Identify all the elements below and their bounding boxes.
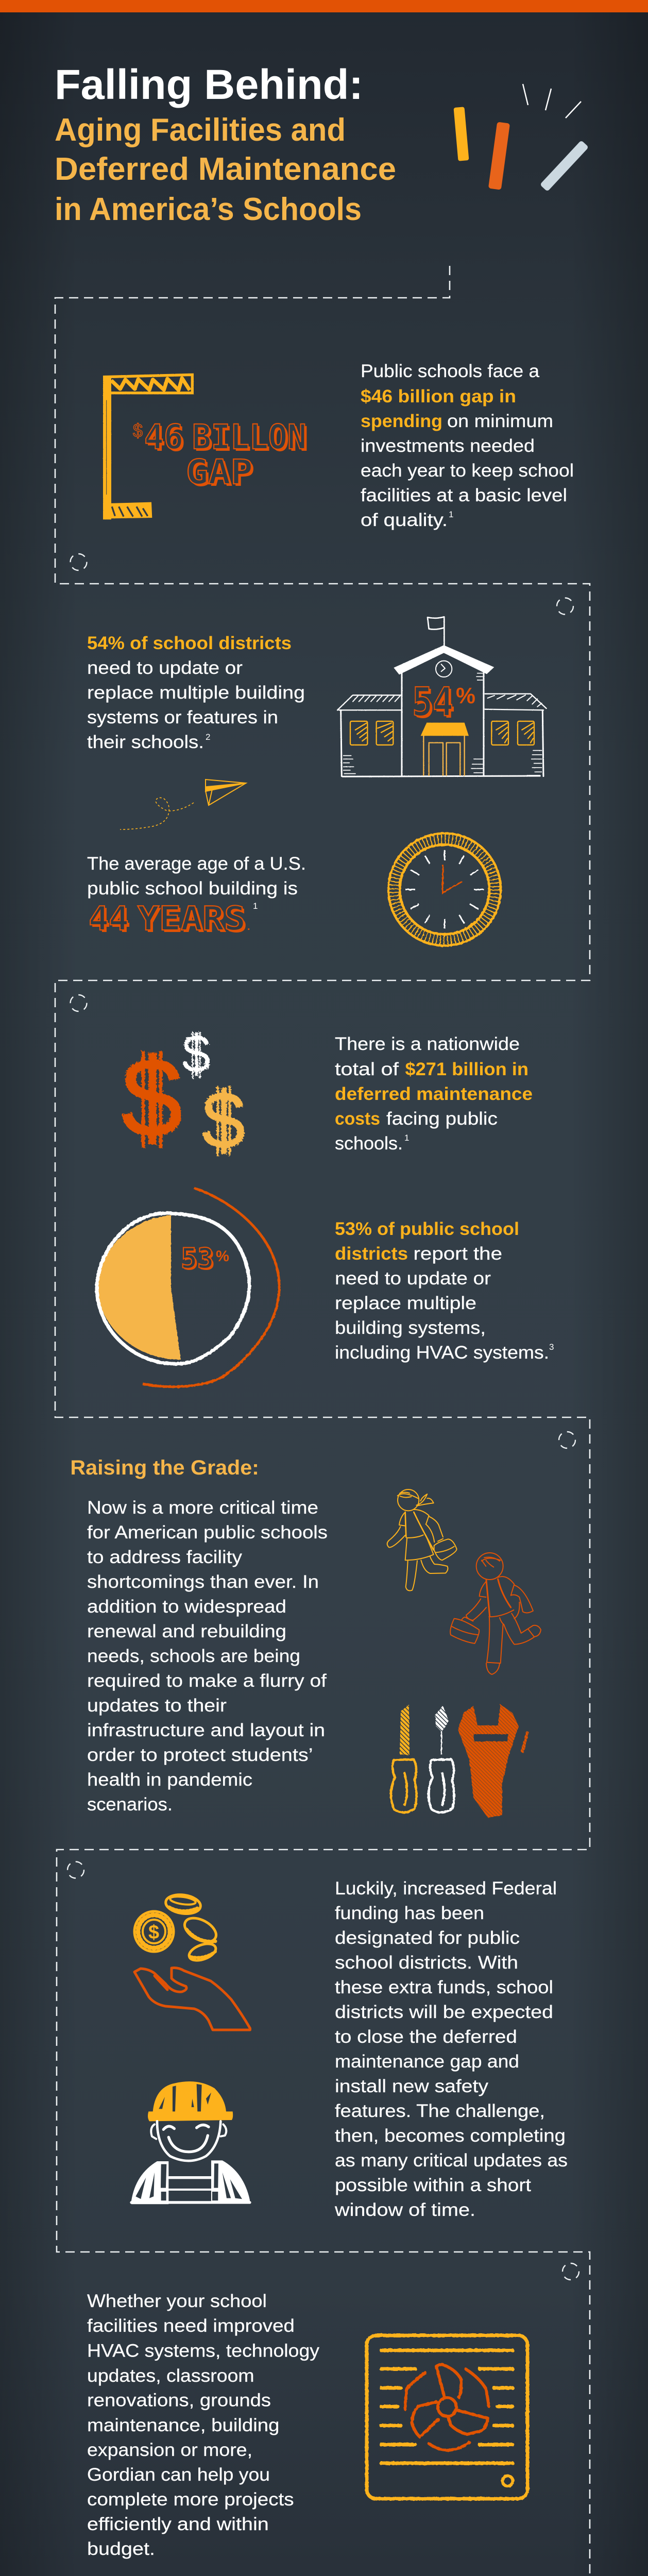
text: 271 billion deferred maintenance: total of	[335, 1059, 399, 1079]
text: 54 percent of districts: systems or features in	[87, 707, 278, 727]
stat: 46 billion gap: BILLON	[192, 417, 306, 457]
text: 53 percent of districts: need to update or	[335, 1268, 491, 1289]
dashed circle markers	[67, 554, 579, 2280]
text: average building age: The average age of a U.S.	[87, 854, 306, 874]
text: 54 percent of districts	[87, 633, 305, 752]
icon: dollar signs: $	[182, 1024, 211, 1084]
text: average building age: 1	[253, 901, 258, 911]
dashed connector path	[55, 266, 590, 2576]
icon: smiling construction worker	[131, 2081, 250, 2204]
title	[55, 61, 396, 227]
text: whether your school paragraph: HVAC systems, technology	[87, 2341, 320, 2361]
text: federal funding paragraph: Luckily, increased Federal	[335, 1878, 557, 1899]
stat: 46 billion gap: $	[133, 420, 143, 441]
text: 46 billion spending gap: spending	[361, 411, 442, 431]
title: Aging Facilities and	[55, 112, 346, 148]
text: critical time paragraph: addition to widespread	[87, 1597, 286, 1617]
heading: raising the grade: Raising the Grade:	[70, 1456, 259, 1479]
icon: dollar signs: $	[122, 1035, 182, 1160]
text: whether your school paragraph: maintenance, building	[87, 2415, 279, 2435]
text: 271 billion deferred maintenance	[335, 1034, 533, 1154]
stat: 46 billion gap: GAP	[186, 452, 253, 492]
text: federal funding paragraph: funding has been	[335, 1903, 484, 1923]
text: federal funding paragraph	[334, 1878, 568, 2220]
text: 46 billion spending gap: Public schools face a	[361, 361, 540, 381]
icon: 46 billion gap bracket	[103, 375, 192, 519]
text: whether your school paragraph: facilities need improved	[87, 2316, 295, 2336]
text: federal funding paragraph: these extra funds, school	[335, 1977, 553, 1997]
text: whether your school paragraph: renovations, grounds	[87, 2391, 271, 2410]
text: whether your school paragraph: efficiently and within	[87, 2514, 269, 2534]
chart: 53 percent pie	[97, 1188, 279, 1387]
text: 54 percent of districts: their schools.	[87, 732, 204, 752]
text: 53 percent of districts: districts	[335, 1244, 408, 1264]
text: whether your school paragraph: Gordian can help you	[87, 2465, 270, 2485]
text: 271 billion deferred maintenance: $271 billion in	[405, 1059, 528, 1079]
text: 53 percent of districts: including HVAC systems.	[335, 1343, 549, 1363]
icon: school building: 54	[412, 680, 453, 725]
text: 46 billion spending gap: investments needed	[361, 436, 535, 456]
text: federal funding paragraph: as many critical updates as	[335, 2150, 568, 2171]
text: federal funding paragraph: install new safety	[335, 2076, 489, 2096]
icon: dollar signs	[122, 1024, 245, 1165]
icon: tools	[391, 1704, 529, 1818]
text: 54 percent of districts: 54% of school districts	[87, 633, 292, 653]
text: 271 billion deferred maintenance: costs	[335, 1109, 380, 1129]
icon: school building: %	[456, 683, 475, 708]
text: critical time paragraph: to address facility	[87, 1547, 243, 1567]
text: critical time paragraph: required to make a flurry of	[87, 1671, 327, 1691]
icon: school building	[337, 617, 547, 776]
icon: boy walking with bag	[450, 1553, 541, 1674]
title: Falling Behind:	[55, 61, 363, 108]
text: 46 billion spending gap: 1	[449, 510, 453, 519]
text: 271 billion deferred maintenance: There is a nationwide	[335, 1034, 520, 1054]
text: critical time paragraph: updates to their	[87, 1696, 227, 1716]
text: critical time paragraph: health in pandemic	[87, 1770, 252, 1790]
text: whether your school paragraph	[87, 2291, 320, 2559]
text: average building age: .	[247, 921, 250, 933]
text: federal funding paragraph: maintenance gap and	[335, 2052, 519, 2072]
text: critical time paragraph: order to protect students’	[87, 1745, 313, 1765]
chart: 53 percent pie: 53	[182, 1244, 215, 1276]
text: critical time paragraph: infrastructure and layout in	[87, 1720, 325, 1740]
icon: coins falling into hand: $	[148, 1922, 159, 1943]
icon: girl walking with bag	[387, 1489, 457, 1590]
text: 271 billion deferred maintenance: 1	[404, 1133, 409, 1143]
text: federal funding paragraph: school districts. With	[335, 1953, 518, 1973]
text: 54 percent of districts: need to update or	[87, 658, 243, 678]
text: 46 billion spending gap: of quality.	[361, 510, 448, 530]
icon: school building: 54	[414, 682, 455, 727]
text: federal funding paragraph: districts will be expected	[335, 2002, 553, 2022]
text: 271 billion deferred maintenance: facing public	[386, 1109, 498, 1129]
text: whether your school paragraph: budget.	[87, 2539, 155, 2559]
text: 46 billion spending gap: each year to keep school	[361, 461, 574, 481]
text: critical time paragraph: scenarios.	[87, 1794, 173, 1815]
text: 53 percent of districts: report the	[413, 1244, 502, 1264]
text: 46 billion spending gap: on minimum	[447, 411, 553, 431]
text: critical time paragraph: needs, schools are being	[87, 1646, 300, 1666]
text: average building age: public school building is	[87, 878, 298, 899]
text: federal funding paragraph: designated for public	[335, 1928, 520, 1948]
text: 46 billion spending gap	[361, 361, 574, 530]
text: critical time paragraph: renewal and rebuilding	[87, 1621, 286, 1641]
icon: coins falling into hand	[134, 1893, 250, 2030]
stat: 46 billion gap	[133, 417, 309, 494]
stat: 46 billion gap: BILLON	[194, 419, 309, 459]
stat: 46 billion gap: 46	[146, 419, 185, 459]
text: average building age: 44	[89, 900, 129, 938]
text: federal funding paragraph: features. The challenge,	[335, 2101, 545, 2121]
text: 53 percent of districts: replace multiple	[335, 1293, 476, 1313]
stat: 46 billion gap: GAP	[188, 454, 255, 494]
text: 53 percent of districts: 53% of public school	[335, 1219, 519, 1239]
text: 53 percent of districts: building systems,	[335, 1318, 486, 1338]
text: federal funding paragraph: then, becomes completing	[335, 2126, 566, 2146]
icon: dollar signs: $	[202, 1076, 245, 1165]
text: critical time paragraph: Now is a more critical time	[87, 1498, 318, 1518]
text: critical time paragraph: shortcomings than ever. In	[87, 1572, 319, 1592]
text: 46 billion spending gap: facilities at a basic level	[361, 485, 567, 505]
icon: hvac unit with fan	[367, 2335, 527, 2499]
title: in America’s Schools	[55, 192, 362, 227]
text: 46 billion spending gap: $46 billion gap in	[361, 386, 516, 406]
text: average building age: YEARS	[140, 902, 248, 940]
text: average building age	[87, 854, 306, 940]
text: average building age: 44	[91, 902, 131, 940]
text: 54 percent of districts: 2	[206, 732, 210, 742]
text: whether your school paragraph: expansion or more,	[87, 2440, 252, 2460]
text: critical time paragraph: for American public schools	[87, 1522, 328, 1543]
stat: 46 billion gap: 46	[144, 417, 183, 457]
icon: chalk sticks	[454, 84, 589, 192]
text: 53 percent of districts: 3	[549, 1342, 554, 1352]
text: federal funding paragraph: possible within a short	[335, 2175, 531, 2195]
title: Deferred Maintenance	[55, 151, 396, 187]
text: whether your school paragraph: Whether your school	[87, 2291, 267, 2311]
chart: 53 percent pie: 53	[181, 1242, 214, 1275]
text: 53 percent of districts	[335, 1219, 554, 1363]
top orange bar	[0, 0, 648, 12]
text: federal funding paragraph: to close the deferred	[335, 2027, 517, 2047]
icon: paper plane with dashed trail	[120, 779, 246, 829]
text: federal funding paragraph: window of time.	[334, 2200, 475, 2220]
text: 271 billion deferred maintenance: deferred maintenance	[335, 1084, 533, 1104]
text: critical time paragraph	[87, 1498, 328, 1815]
text: whether your school paragraph: updates, classroom	[87, 2366, 254, 2386]
text: whether your school paragraph: complete more projects	[87, 2489, 294, 2510]
icon: wall clock	[388, 834, 501, 946]
text: average building age: YEARS	[138, 900, 246, 938]
text: 271 billion deferred maintenance: schools.	[335, 1133, 403, 1154]
chart: 53 percent pie: %	[216, 1248, 229, 1265]
text: 54 percent of districts: replace multiple building	[87, 683, 305, 703]
